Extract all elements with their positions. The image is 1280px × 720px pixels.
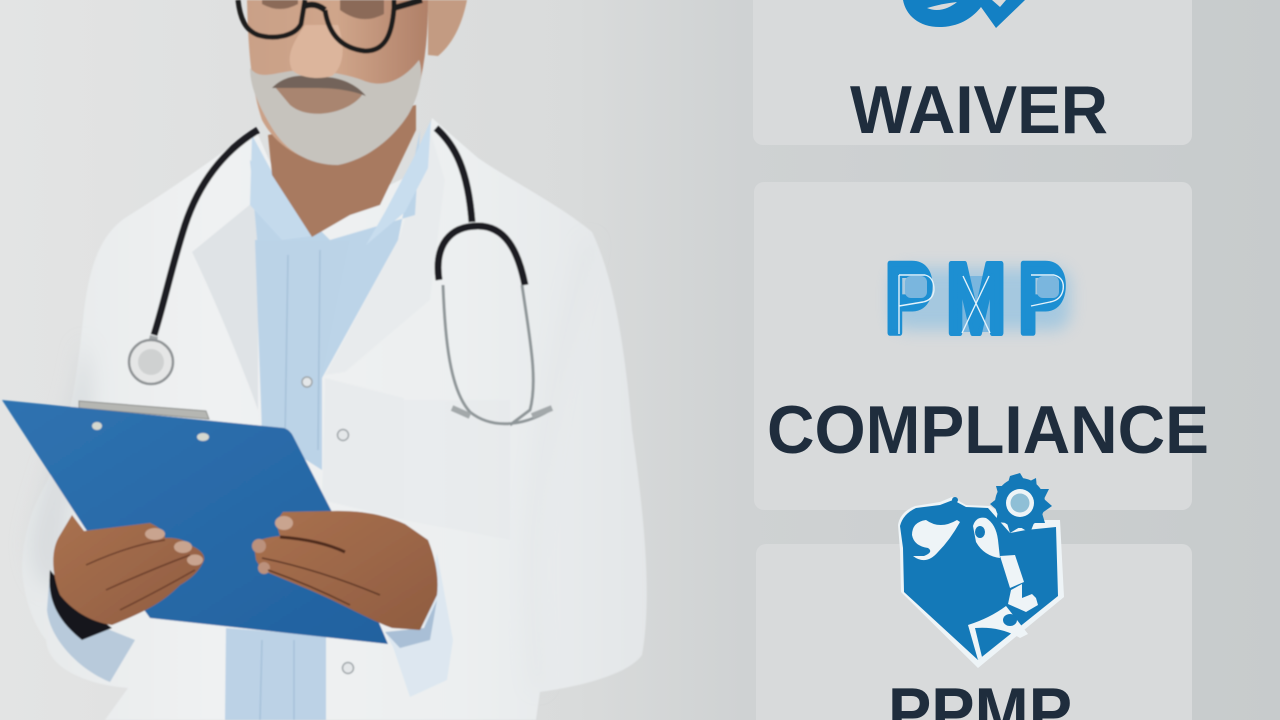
panel: PPMP card	[756, 544, 1192, 720]
clipboard	[2, 400, 388, 644]
beard	[250, 60, 421, 165]
lab coat	[22, 118, 647, 720]
heading: WAIVER: WAIVER	[850, 72, 1108, 148]
stethoscope metal tubes	[443, 285, 550, 425]
coat buttons	[302, 377, 354, 674]
nose	[290, 25, 343, 78]
clip	[79, 401, 209, 419]
icon: PMP neon logo: PMP	[885, 243, 1066, 355]
mustache	[272, 76, 366, 96]
left hand	[53, 515, 204, 625]
right hand	[252, 511, 438, 630]
ear	[428, 0, 467, 56]
face	[247, 0, 428, 163]
coat lapel right	[325, 130, 445, 375]
neck	[268, 105, 416, 237]
heading: COMPLIANCE: COMPLIANCE	[767, 392, 1209, 468]
shirt	[250, 130, 420, 465]
glasses	[238, 0, 422, 51]
right cuff	[385, 553, 453, 697]
eyes	[262, 0, 384, 19]
icon: gear	[990, 473, 1052, 533]
mouth	[275, 80, 362, 114]
icon: PPMP shield with gear and robotic arm	[898, 473, 1064, 668]
shirt placket	[260, 250, 320, 720]
robotic arm	[968, 518, 1038, 660]
icon: waiver emblem	[903, 0, 1025, 28]
shirt collar	[250, 135, 312, 240]
stethoscope right tube	[436, 128, 472, 222]
left cuff and dark sleeve	[47, 570, 135, 682]
coat shadows	[30, 340, 92, 590]
splash shape	[912, 520, 960, 560]
stethoscope left tube	[154, 130, 258, 335]
illustration: doctor	[2, 0, 647, 720]
panel: waiver card	[753, 0, 1192, 148]
chest piece	[129, 335, 173, 384]
panel: PMP compliance card	[754, 182, 1209, 510]
stethoscope headset	[438, 226, 525, 285]
